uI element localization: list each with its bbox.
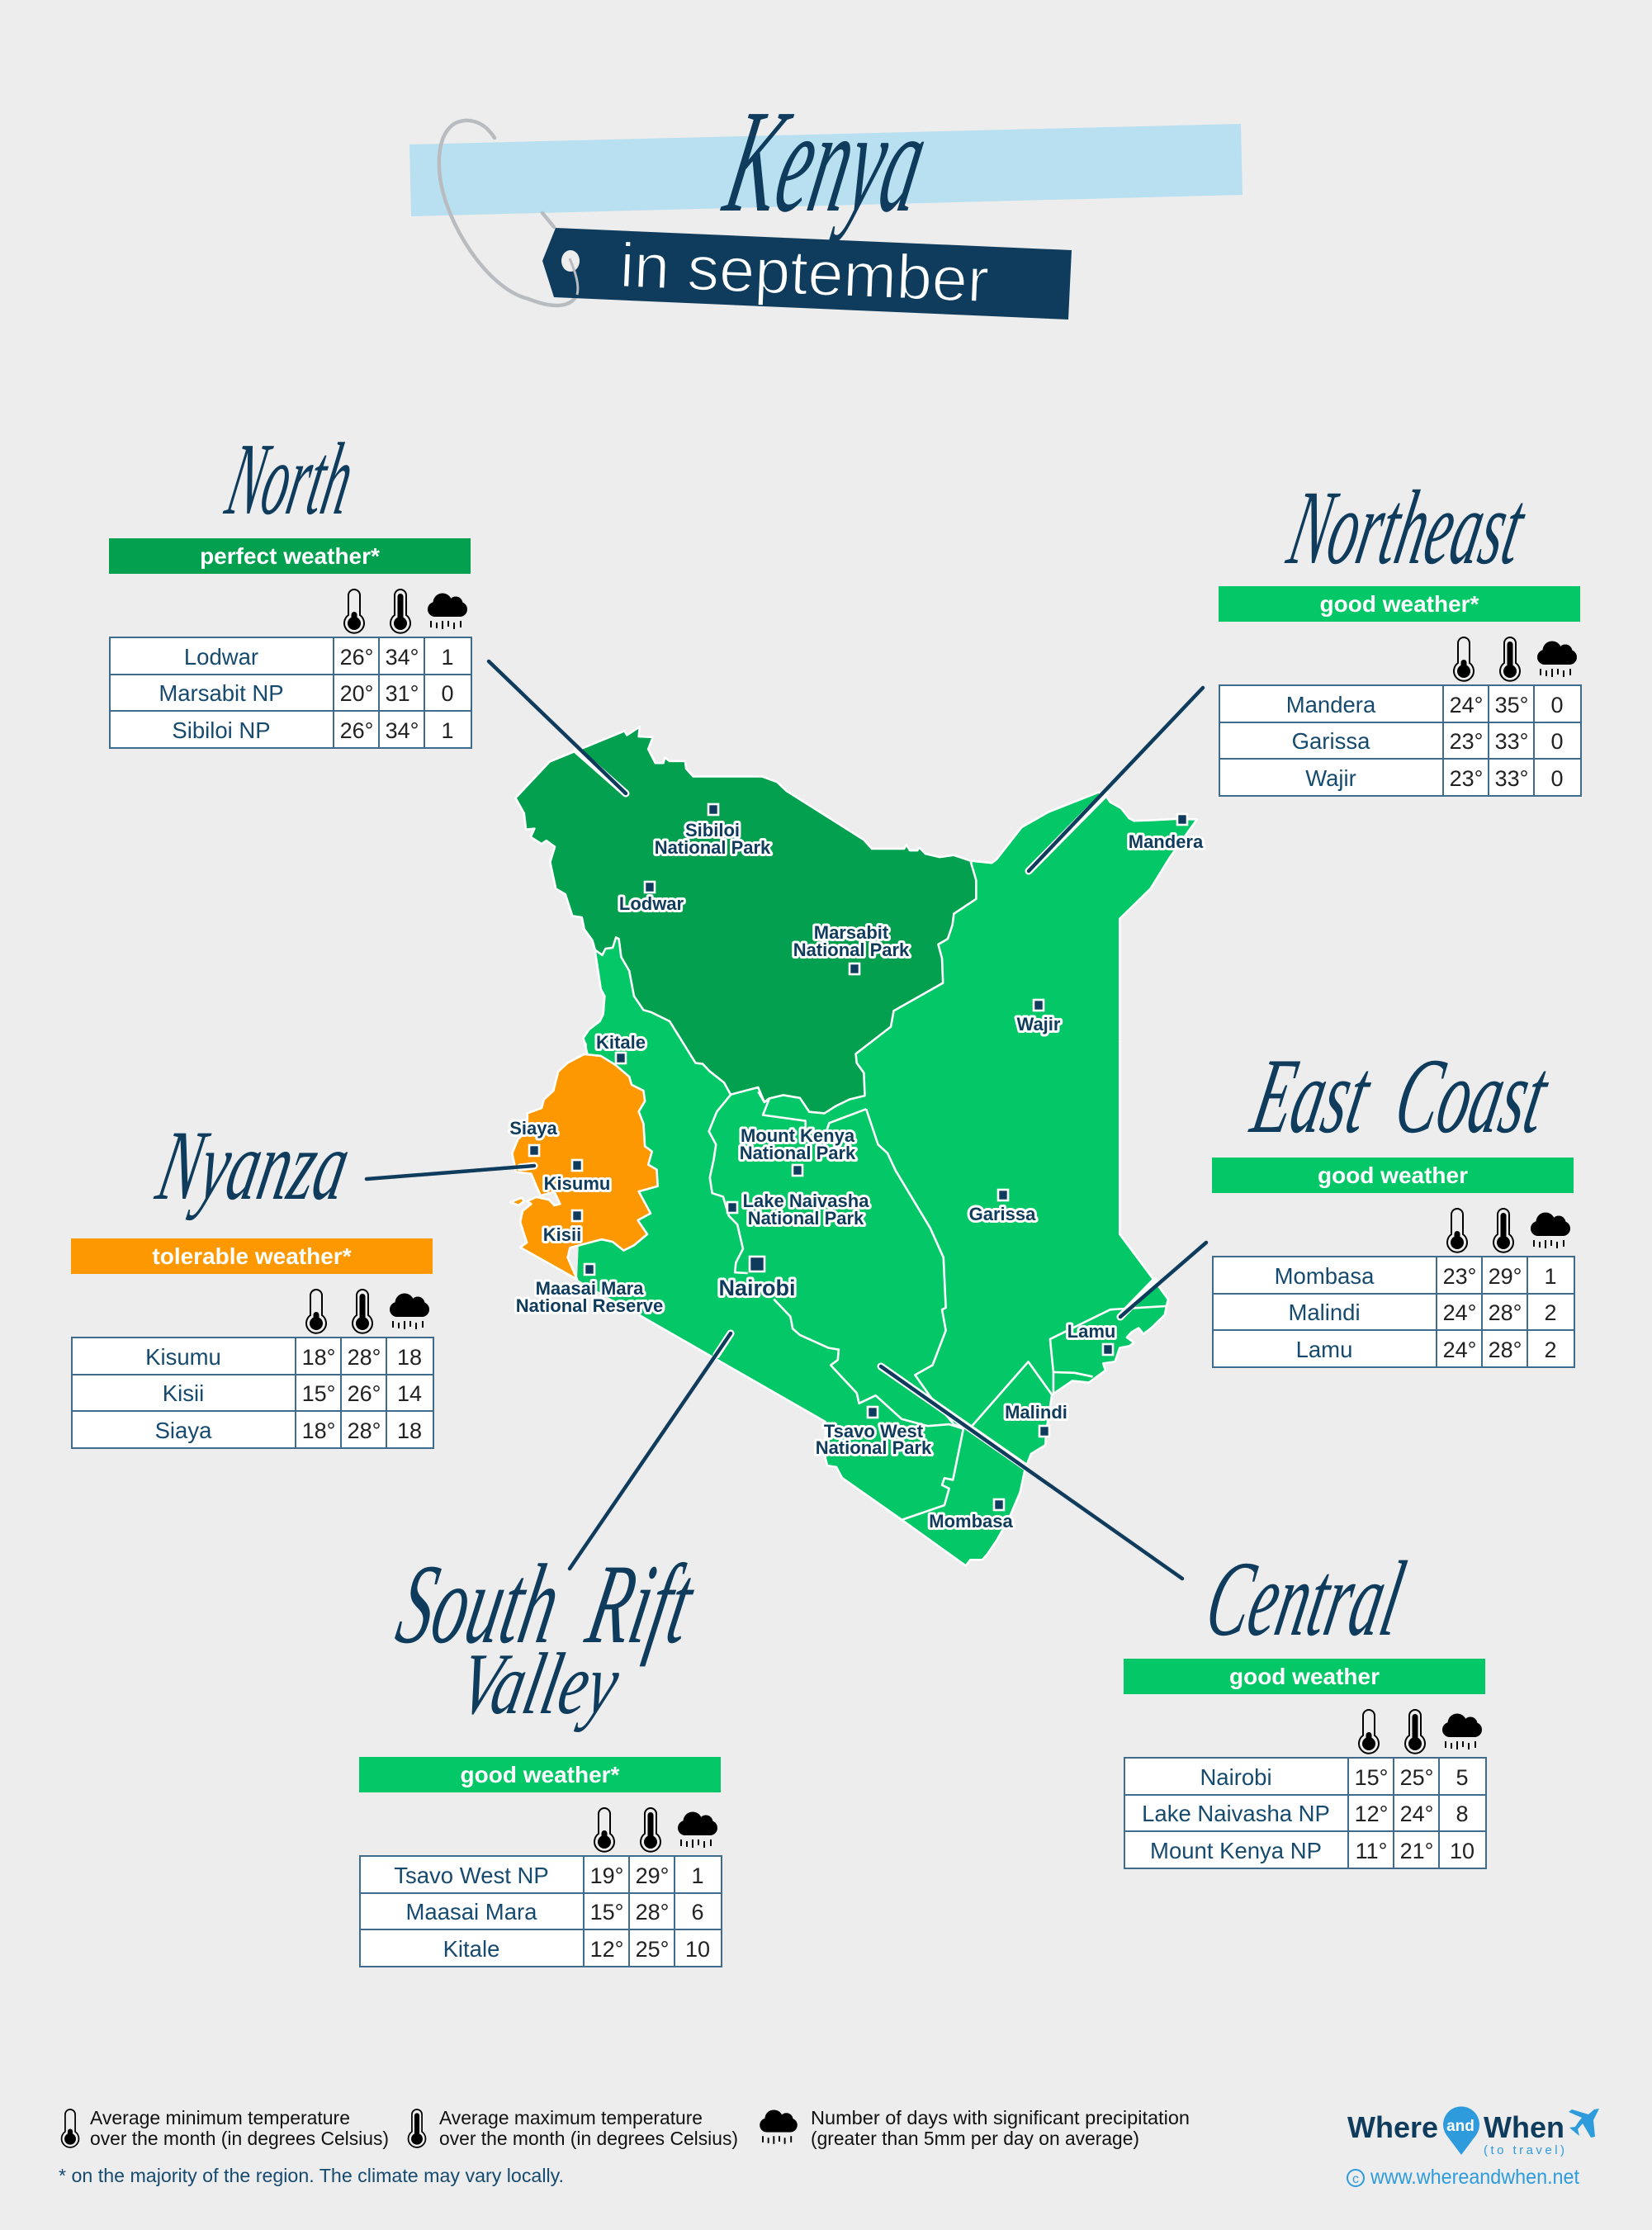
table: 1 — [441, 718, 454, 743]
table: 0 — [1550, 766, 1564, 791]
table: Mount Kenya NP — [1150, 1838, 1322, 1863]
table: 26° — [340, 718, 373, 743]
map place labels: National Park — [655, 837, 771, 858]
table: Siaya — [155, 1418, 212, 1443]
table — [360, 1856, 722, 1967]
icon: rain cloud — [390, 1293, 429, 1329]
table: 1 — [691, 1863, 704, 1888]
legend icon: max temperature — [409, 2109, 425, 2147]
icon: rain cloud — [678, 1811, 717, 1848]
logo word: Where: Where — [1347, 2110, 1438, 2144]
table: Tsavo West NP — [394, 1863, 549, 1888]
legend text: min temperature: Average minimum temperature — [90, 2107, 350, 2128]
Northeast body — [1219, 586, 1581, 796]
map place labels: Sibiloi — [685, 820, 740, 840]
rating text: tolerable weather* — [152, 1243, 352, 1269]
table: 28° — [1489, 1338, 1522, 1362]
table: 18 — [397, 1418, 422, 1443]
table: 15° — [302, 1381, 335, 1406]
table — [1219, 685, 1581, 796]
title block: Kenya in september — [409, 79, 1243, 320]
callout leader lines — [367, 661, 1206, 1579]
map place labels: Lodwar — [619, 893, 684, 914]
icon: max temperature — [641, 1808, 660, 1852]
rating bar — [1219, 586, 1580, 622]
map place labels: National Park — [748, 1208, 864, 1229]
legend text: precipitation: Number of days with significant precipitation — [811, 2107, 1190, 2128]
map place labels: National Park — [740, 1143, 856, 1163]
dark luggage tag — [542, 228, 1072, 320]
table: 21° — [1400, 1839, 1433, 1863]
legend text: max temperature: over the month (in degrees Celsius) — [439, 2128, 738, 2149]
logo tagline: (to travel) — [1484, 2143, 1564, 2157]
table: 25° — [636, 1937, 669, 1962]
table: 35° — [1495, 693, 1528, 717]
footnote: * on the majority of the region. The climate may vary locally. — [59, 2165, 564, 2186]
map place labels: Tsavo West — [824, 1421, 924, 1442]
table: 29° — [1489, 1264, 1522, 1289]
map place labels: National Park — [793, 940, 910, 960]
table: 0 — [441, 681, 454, 706]
table: 11° — [1356, 1839, 1387, 1863]
table: Garissa — [1292, 728, 1370, 754]
Nyanza body — [71, 1238, 433, 1448]
map place labels: Garissa — [969, 1204, 1036, 1224]
table: Sibiloi NP — [172, 717, 271, 743]
legend text: precipitation: (greater than 5mm per day on average) — [811, 2128, 1139, 2149]
logo word: and: and — [1446, 2118, 1474, 2135]
icon: min temperature — [344, 589, 364, 633]
table: Nairobi — [1200, 1764, 1272, 1790]
rating bar — [109, 538, 471, 574]
table: Kisii — [163, 1380, 204, 1406]
table — [1213, 1257, 1574, 1367]
table: 15° — [1355, 1765, 1388, 1790]
table: 33° — [1495, 729, 1528, 754]
table: Marsabit NP — [159, 680, 284, 706]
table: 18° — [302, 1345, 335, 1370]
heading: Nyanza: Nyanza — [149, 1110, 359, 1220]
map markers: location squares — [529, 804, 1187, 1510]
icon: max temperature — [391, 589, 410, 633]
rating bar — [1212, 1158, 1574, 1193]
map place labels: Maasai Mara — [536, 1278, 644, 1299]
table: 2 — [1544, 1300, 1557, 1325]
legend — [59, 2107, 1190, 2186]
icon: max temperature — [1493, 1209, 1513, 1252]
map place labels: National Reserve — [516, 1295, 663, 1316]
icon: min temperature — [1359, 1710, 1379, 1754]
table: 14 — [397, 1381, 422, 1406]
legend text: min temperature — [90, 2107, 389, 2149]
Central body — [1124, 1659, 1486, 1868]
legend text: max temperature — [439, 2107, 738, 2149]
table: Mandera — [1286, 692, 1376, 717]
table: 12° — [590, 1937, 623, 1962]
table: 10 — [1450, 1839, 1474, 1863]
map place labels: National Park — [816, 1437, 932, 1458]
icon: rain cloud — [1442, 1714, 1482, 1749]
table: 34° — [386, 645, 419, 670]
South Rift Valley body — [359, 1757, 722, 1967]
heading: East Coast: East Coast — [1242, 1037, 1559, 1156]
logo icon: plane — [1569, 2109, 1599, 2138]
heading: South Rift Valley — [388, 1541, 705, 1732]
table: 24° — [1400, 1802, 1433, 1826]
map place labels: Malindi — [1005, 1402, 1067, 1423]
tag string — [439, 121, 578, 305]
map place labels: Kisii — [543, 1224, 581, 1245]
table: 24° — [1450, 693, 1483, 717]
map region: Nyanza (orange) — [510, 1054, 658, 1280]
map place labels: Lamu — [1067, 1321, 1115, 1342]
icon: max temperature — [1405, 1710, 1425, 1754]
map place labels: Kisumu — [544, 1173, 610, 1194]
light blue title band — [409, 124, 1243, 216]
table: 34° — [386, 718, 419, 743]
table: 8 — [1456, 1802, 1469, 1826]
map place labels: Wajir — [1017, 1014, 1061, 1035]
North body — [109, 538, 471, 748]
legend text: min temperature: over the month (in degrees Celsius) — [90, 2128, 389, 2149]
table: 20° — [340, 681, 373, 706]
table: Lake Naivasha NP — [1142, 1801, 1330, 1826]
table: 1 — [1544, 1264, 1557, 1289]
icon: max temperature — [1500, 637, 1520, 681]
rating text: good weather — [1318, 1162, 1468, 1188]
table: 5 — [1456, 1765, 1469, 1790]
map region: North (dark green) — [515, 727, 976, 1113]
map place labels: Lake Naivasha — [743, 1191, 869, 1211]
rating text: perfect weather* — [200, 543, 380, 569]
table: 31° — [386, 681, 419, 706]
map place labels: Mombasa — [929, 1511, 1013, 1532]
table: 23° — [1450, 729, 1483, 754]
title: Kenya: Kenya — [712, 79, 940, 243]
table: 15° — [590, 1900, 623, 1925]
table: 23° — [1450, 766, 1483, 791]
map place labels: Siaya — [509, 1118, 558, 1139]
icon: rain cloud — [1531, 1212, 1570, 1248]
table: 25° — [1400, 1765, 1433, 1790]
panel: East Coast — [1212, 1037, 1574, 1367]
tag string front — [570, 258, 578, 295]
table: 28° — [636, 1900, 669, 1925]
table: 18° — [302, 1418, 335, 1443]
table: 0 — [1550, 729, 1564, 754]
heading: North: North — [218, 422, 363, 536]
table: 23° — [1443, 1264, 1476, 1289]
map place labels: Marsabit — [814, 922, 889, 943]
table: 6 — [691, 1900, 704, 1925]
legend text: max temperature: Average maximum temperature — [439, 2107, 703, 2128]
table: 18 — [397, 1345, 422, 1370]
East Coast body — [1212, 1158, 1574, 1367]
rating bar — [359, 1757, 721, 1792]
panel: Northeast — [1219, 468, 1581, 796]
logo word: When: When — [1484, 2110, 1564, 2144]
panel: Nyanza — [71, 1110, 433, 1448]
logo pin — [1443, 2106, 1479, 2155]
table: Kisumu — [145, 1344, 221, 1370]
table: 28° — [348, 1345, 381, 1370]
subtitle: in september: in september — [618, 230, 990, 316]
rating text: good weather — [1229, 1664, 1380, 1689]
icon: min temperature — [1454, 637, 1474, 681]
icon: min temperature — [306, 1290, 326, 1333]
icon: min temperature — [594, 1808, 614, 1852]
table: 24° — [1443, 1338, 1476, 1362]
table: 19° — [590, 1863, 623, 1888]
panel: South Rift Valley — [359, 1541, 722, 1967]
tag hole — [561, 250, 580, 272]
table: Wajir — [1305, 765, 1356, 791]
panel: North — [109, 422, 471, 748]
heading: Northeast: Northeast — [1279, 468, 1536, 586]
icon: rain cloud — [428, 593, 467, 629]
table: 28° — [1489, 1300, 1522, 1325]
map place labels: Nairobi — [718, 1276, 796, 1300]
map place labels — [509, 820, 1204, 1532]
rating text: good weather* — [461, 1762, 620, 1787]
map of Kenya — [367, 661, 1206, 1579]
table: 2 — [1544, 1338, 1557, 1362]
table: 26° — [340, 645, 373, 670]
heading: Central: Central — [1197, 1540, 1413, 1659]
table: Mombasa — [1275, 1263, 1375, 1289]
map place labels: Mandera — [1129, 831, 1204, 852]
legend icon: rain cloud — [760, 2109, 798, 2144]
table — [1124, 1758, 1486, 1868]
legend icon: min temperature — [62, 2109, 78, 2147]
icon: min temperature — [1447, 1209, 1467, 1252]
website: www.whereandwhen.net — [1370, 2166, 1579, 2189]
map: green outer outlines — [584, 793, 1197, 1565]
heading: South Rift Valley: Valley — [452, 1635, 628, 1732]
logo: Where and When — [1347, 2106, 1599, 2189]
legend text: precipitation — [811, 2107, 1190, 2149]
copyright icon: c — [1352, 2172, 1359, 2186]
copyright icon — [1347, 2170, 1364, 2186]
table: Lodwar — [184, 644, 258, 670]
icon: max temperature — [353, 1290, 372, 1333]
heading: South Rift Valley: South Rift — [388, 1541, 705, 1668]
table: 26° — [348, 1381, 381, 1406]
rating text: good weather* — [1320, 591, 1479, 617]
table — [110, 637, 471, 748]
table: 29° — [636, 1863, 669, 1888]
table: Malindi — [1288, 1300, 1361, 1325]
map place labels: Mount Kenya — [741, 1125, 855, 1146]
table: Kitale — [443, 1936, 499, 1962]
rating bar — [71, 1238, 433, 1274]
table — [72, 1338, 433, 1448]
map place labels: Kitale — [596, 1032, 646, 1053]
table: 10 — [685, 1937, 710, 1962]
table: 24° — [1443, 1300, 1476, 1325]
table: 33° — [1495, 766, 1528, 791]
table: Maasai Mara — [406, 1899, 537, 1925]
map: internal region borders — [709, 1091, 1166, 1520]
map: green regions — [577, 793, 1197, 1565]
table: 0 — [1550, 693, 1564, 717]
rating bar — [1124, 1659, 1485, 1694]
table: 28° — [348, 1418, 381, 1443]
table: 12° — [1355, 1802, 1388, 1826]
icon: rain cloud — [1537, 641, 1577, 677]
table: 1 — [441, 645, 454, 670]
table: Lamu — [1296, 1337, 1352, 1362]
panel: Central — [1124, 1540, 1486, 1868]
